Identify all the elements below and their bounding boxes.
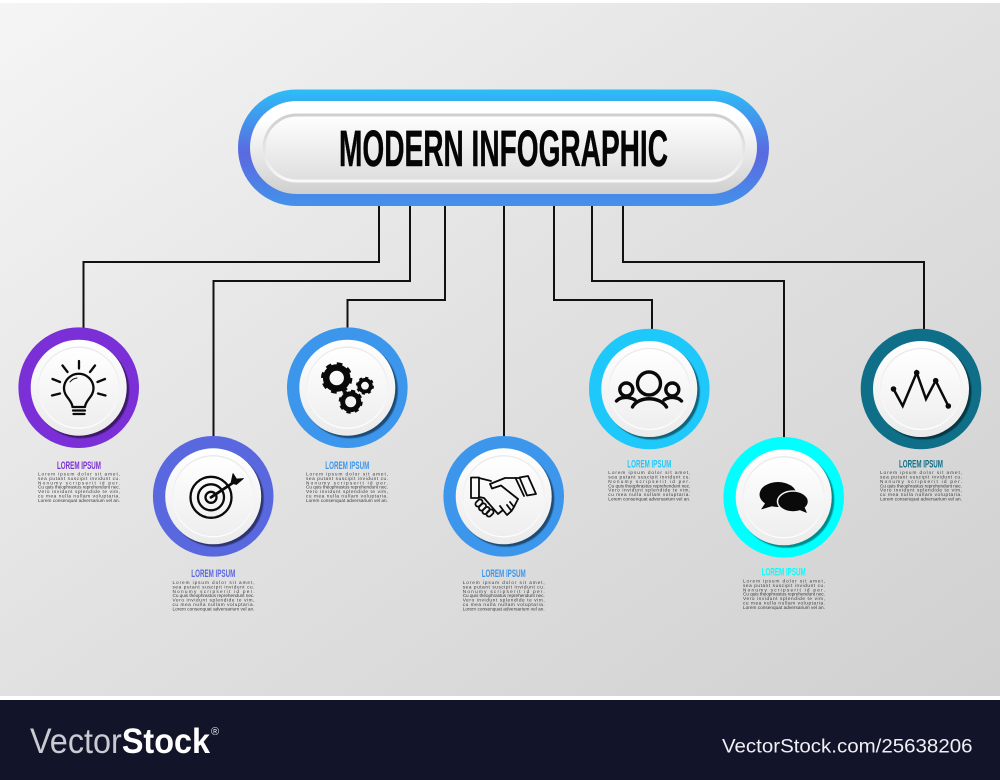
text: item 5: LOREM IPSUM	[627, 459, 671, 471]
text: item 2: sea putant suscipit invidunt cu.	[172, 584, 254, 589]
text: item 7: Cu quis theophrastus reprehendunt nec.	[880, 483, 962, 488]
text: item 1: Vero invidunt splendide te vim,	[38, 489, 120, 494]
text: item 7: Lorem ipsum dolor sit amet,	[880, 470, 962, 475]
footer id: VectorStock.com/25638206	[722, 737, 972, 758]
title pill	[238, 90, 769, 206]
text: item 6: cu mea nulla nullam voluptaria.	[743, 600, 825, 605]
node 7: chart	[861, 329, 981, 502]
text: item 3: Lorem consenquat adversarium vel an.	[306, 498, 388, 503]
connector lines	[84, 205, 924, 438]
text: item 2: Lorem ipsum dolor sit amet,	[172, 580, 254, 585]
node 1: idea	[18, 327, 139, 503]
text: item 3: LOREM IPSUM	[325, 460, 369, 472]
text: item 1: sea putant suscipit invidunt cu.	[38, 476, 120, 481]
text: item 7: Nonumy scripserit id per.	[880, 479, 962, 484]
text: item 6: sea putant suscipit invidunt cu.	[743, 583, 825, 588]
text: item 4: Lorem consenquat adversarium vel an.	[463, 606, 545, 611]
text: item 4: cu mea nulla nullam voluptaria.	[463, 602, 545, 607]
text: item 2: Vero invidunt splendide te vim,	[172, 598, 254, 602]
text: item 5	[608, 459, 690, 502]
text: item 2: Lorem consenquat adversarium vel an.	[172, 606, 254, 611]
node 4: handshake	[443, 436, 564, 611]
text: item 3: Cu quis theophrastus reprehendunt nec.	[306, 485, 388, 490]
text: item 4	[463, 568, 545, 611]
text: item 5: cu mea nulla nullam voluptaria.	[608, 492, 690, 497]
text: item 3: cu mea nulla nullam voluptaria.	[306, 493, 388, 498]
node 5: people	[589, 329, 710, 502]
text: item 4: Nonumy scripserit id per.	[463, 589, 545, 594]
text: item 6: LOREM IPSUM	[762, 567, 806, 579]
text: item 7: cu mea nulla nullam voluptaria.	[880, 492, 962, 497]
text: item 3: sea putant suscipit invidunt cu.	[306, 476, 388, 481]
text: item 5: Vero invidunt splendide te vim,	[608, 488, 690, 493]
text: item 3: Lorem ipsum dolor sit amet,	[306, 472, 388, 476]
icon: line chart	[891, 370, 951, 408]
title: MODERN INFOGRAPHIC	[339, 120, 668, 177]
node 3: gears	[287, 327, 408, 503]
text: item 7	[880, 459, 962, 502]
text: item 1: Lorem consenquat adversarium vel an.	[38, 498, 120, 503]
icon: light bulb	[52, 361, 106, 414]
text: item 1: Lorem ipsum dolor sit amet,	[38, 472, 120, 476]
text: item 2: Cu quis theophrastus reprehendunt nec.	[172, 593, 254, 598]
node 2: target	[153, 436, 274, 611]
text: item 1: cu mea nulla nullam voluptaria.	[38, 493, 120, 498]
icon: handshake	[471, 476, 536, 518]
text: item 5: Lorem consenquat adversarium vel an.	[608, 496, 690, 502]
icon: target	[190, 474, 244, 518]
text: item 2: Nonumy scripserit id per.	[172, 589, 254, 594]
icon: speech bubbles	[760, 482, 808, 513]
text: item 1: LOREM IPSUM	[57, 460, 101, 472]
text: item 6: Vero invidunt splendide te vim,	[743, 596, 825, 601]
text: item 6: Nonumy scripserit id per.	[743, 587, 825, 592]
text: item 6	[743, 567, 825, 610]
text: item 3	[306, 460, 388, 503]
node 6: chat	[723, 437, 844, 610]
text: item 1: Cu quis theophrastus reprehendunt nec.	[38, 485, 120, 490]
text: item 2	[172, 568, 254, 611]
text: item 7: Lorem consenquat adversarium vel an.	[880, 496, 962, 502]
text: item 4: Vero invidunt splendide te vim,	[463, 598, 545, 602]
text: item 3: Vero invidunt splendide te vim,	[306, 489, 388, 494]
icon: people	[616, 372, 682, 407]
footer bar	[0, 700, 1000, 780]
text: item 5: Cu quis theophrastus reprehendunt nec.	[608, 483, 690, 488]
text: item 4: Lorem ipsum dolor sit amet,	[463, 580, 545, 585]
text: item 6: Lorem consenquat adversarium vel an.	[743, 605, 825, 610]
text: item 5: Nonumy scripserit id per.	[608, 479, 690, 484]
text: item 4: sea putant suscipit invidunt cu.	[463, 584, 545, 589]
footer logo: VectorStock	[30, 722, 210, 761]
text: item 1: Nonumy scripserit id per.	[38, 480, 120, 485]
text: item 7: sea putant suscipit invidunt cu.	[880, 475, 962, 480]
text: item 6: Cu quis theophrastus reprehendunt nec.	[743, 592, 825, 597]
text: item 5: Lorem ipsum dolor sit amet,	[608, 470, 690, 475]
text: item 7: LOREM IPSUM	[899, 459, 943, 471]
text: item 7: Vero invidunt splendide te vim,	[880, 488, 962, 493]
text: item 4: LOREM IPSUM	[482, 568, 526, 580]
text: item 2: LOREM IPSUM	[191, 568, 235, 580]
registered mark: ®	[211, 726, 219, 738]
icon: gears	[322, 364, 373, 413]
text: item 4: Cu quis theophrastus reprehendunt nec.	[463, 593, 545, 598]
text: item 1	[38, 460, 120, 503]
text: item 6: Lorem ipsum dolor sit amet,	[743, 578, 825, 584]
text: item 3: Nonumy scripserit id per.	[306, 480, 388, 485]
text: item 5: sea putant suscipit invidunt cu.	[608, 475, 690, 480]
text: item 2: cu mea nulla nullam voluptaria.	[172, 602, 254, 607]
